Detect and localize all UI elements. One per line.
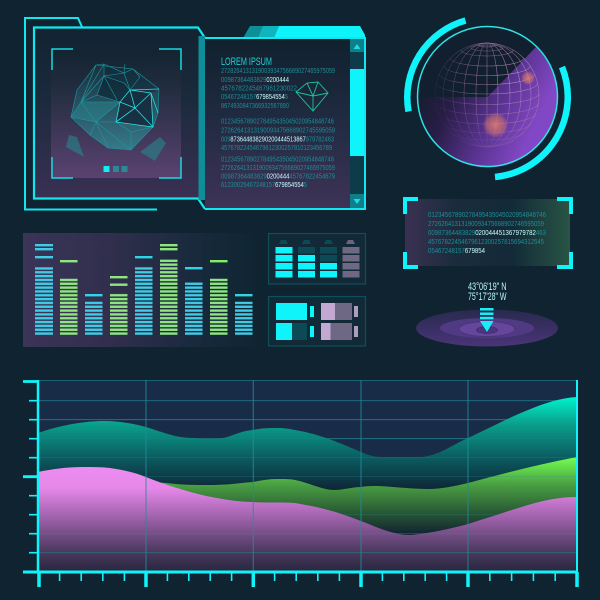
battery 3 (320, 240, 337, 278)
mid grid lines (38, 420, 577, 515)
note background (405, 199, 570, 266)
icon: diamond (296, 82, 328, 111)
ripple middle (440, 318, 534, 338)
text block 1: 4576782245467961230022 (221, 86, 297, 92)
text block 2: 45767822454679612300257810123456789 (221, 145, 332, 152)
data digits: 05467248157679854 (428, 248, 485, 255)
image area (51, 49, 181, 178)
viewer background (34, 28, 199, 198)
battery 4 (342, 240, 360, 278)
location marker on ripples (416, 308, 558, 346)
ripple center (476, 326, 498, 334)
plot background (38, 380, 577, 572)
data digits (428, 212, 546, 255)
panel: data note (405, 199, 571, 267)
icon: crystal shard left (66, 135, 84, 157)
corner brackets (405, 199, 571, 267)
top tab teal section (243, 26, 265, 38)
ring arc right (495, 67, 568, 177)
icon: crystal shard right (140, 137, 166, 161)
lower and vertical grid lines (38, 380, 577, 572)
battery 2 (298, 240, 315, 278)
coordinates label (468, 281, 507, 303)
panel: radar globe (407, 20, 568, 177)
glow spot large (482, 112, 508, 138)
panel: crystal viewer (25, 18, 205, 210)
panel: battery levels vertical (268, 234, 366, 284)
radar sweep wedge (417, 47, 557, 167)
battery half mauve (321, 303, 358, 320)
teal side strip (198, 36, 205, 200)
battery half cyan (276, 323, 314, 340)
heading: LOREM IPSUM (221, 56, 272, 68)
text block 1 (221, 68, 335, 110)
text block 3: 01234567890278495435045020954848746 (221, 156, 334, 164)
area chart (23, 380, 578, 587)
pink area (38, 467, 577, 572)
text block 1: 009873644838290200444 (221, 77, 289, 84)
panel: equalizer (23, 233, 255, 347)
ripple inner (459, 322, 515, 336)
y axis (23, 380, 38, 573)
text block 2 (221, 118, 335, 152)
viewer frame line (34, 27, 205, 209)
globe wireframe (435, 43, 539, 147)
scrollbar (350, 39, 364, 208)
text block 1: 054672481576798545545 (221, 94, 288, 101)
panel border (268, 234, 366, 284)
top tab light section (258, 26, 279, 38)
coordinates label: 43°06'19" N (468, 281, 507, 293)
green area (150, 457, 577, 572)
battery 1 (276, 240, 292, 278)
x axis (23, 380, 578, 587)
text block 3: 272626413131900934756689027465975059 (221, 165, 335, 172)
bars (35, 260, 252, 336)
panel border (268, 296, 366, 346)
panel body (205, 39, 351, 208)
equalizer background (23, 233, 255, 347)
glow spot small (521, 71, 535, 85)
text block 1: 2728264131319003934756689027465975059 (221, 68, 335, 75)
text block 2: 009873644838290200444513867979782463 (221, 136, 334, 144)
ring arc left (407, 20, 466, 112)
corner brackets (52, 49, 181, 178)
icon: wireframe crystal (71, 64, 159, 150)
battery full cyan (276, 303, 314, 320)
text block 3: 612300254672481576798545545 (221, 182, 307, 189)
panel: text readout (198, 26, 365, 209)
data digits: 27262641313190093475668902746595059 (428, 221, 544, 228)
upper grid lines behind teal (38, 380, 577, 439)
ripple outer (416, 310, 558, 346)
teal area (38, 397, 577, 572)
panel border (205, 38, 365, 209)
text block 2: 01234567890278495435045020954848746 (221, 118, 334, 126)
top tab (270, 26, 365, 38)
text block 3: 00987364483829020044445767822454679 (221, 174, 335, 180)
text block 2: 27262641313190093475668902745595059 (221, 128, 335, 134)
marker pin (480, 308, 494, 332)
data digits: 45767822454679612300257815694312545 (428, 239, 544, 246)
data digits: 01234567890278495435045020954848746 (428, 212, 546, 219)
pager dots (104, 166, 128, 172)
text block 3 (221, 156, 335, 189)
radar disc (418, 26, 558, 166)
coordinates label: 75°17'28" W (468, 291, 507, 303)
radar ring (418, 26, 558, 166)
outer frame line (25, 18, 157, 210)
battery low mauve (321, 323, 358, 340)
data digits: 00987364483829020044451367979782463 (428, 230, 546, 237)
text block 1: 8674930847366932567890 (221, 103, 289, 110)
peak markers (35, 244, 252, 296)
panel: battery levels horizontal (268, 296, 366, 346)
